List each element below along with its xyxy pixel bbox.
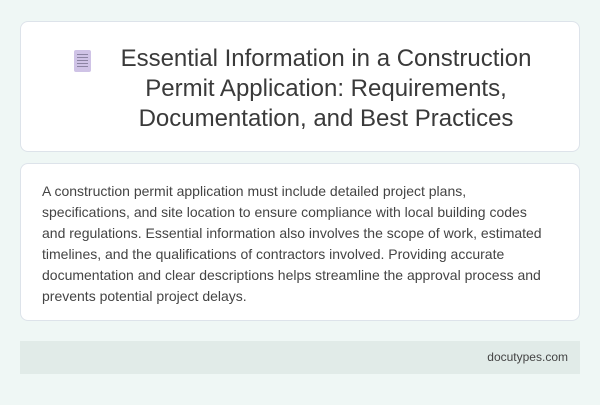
text block [42,183,542,304]
text block: timelines, and the qualifications of contractors involved. Providing accurate [42,246,504,262]
text block: specifications, and site location to ensure compliance with local building codes [42,204,527,220]
title: Essential Information in a Construction Permit Application: Requirements, Documentation, and Best Practices [121,45,531,132]
footer text: docutypes.com [487,350,568,364]
text block: documentation and clear descriptions helps streamline the approval process and [42,267,541,283]
panel: description [20,163,580,321]
text block: A construction permit application must include detailed project plans, [42,183,466,199]
text block: prevents potential project delays. [42,288,247,304]
footer [20,341,580,374]
text block: and regulations. Essential information also involves the scope of work, estimated [42,225,542,241]
icon: document [74,50,91,72]
panel: title card [20,21,580,152]
